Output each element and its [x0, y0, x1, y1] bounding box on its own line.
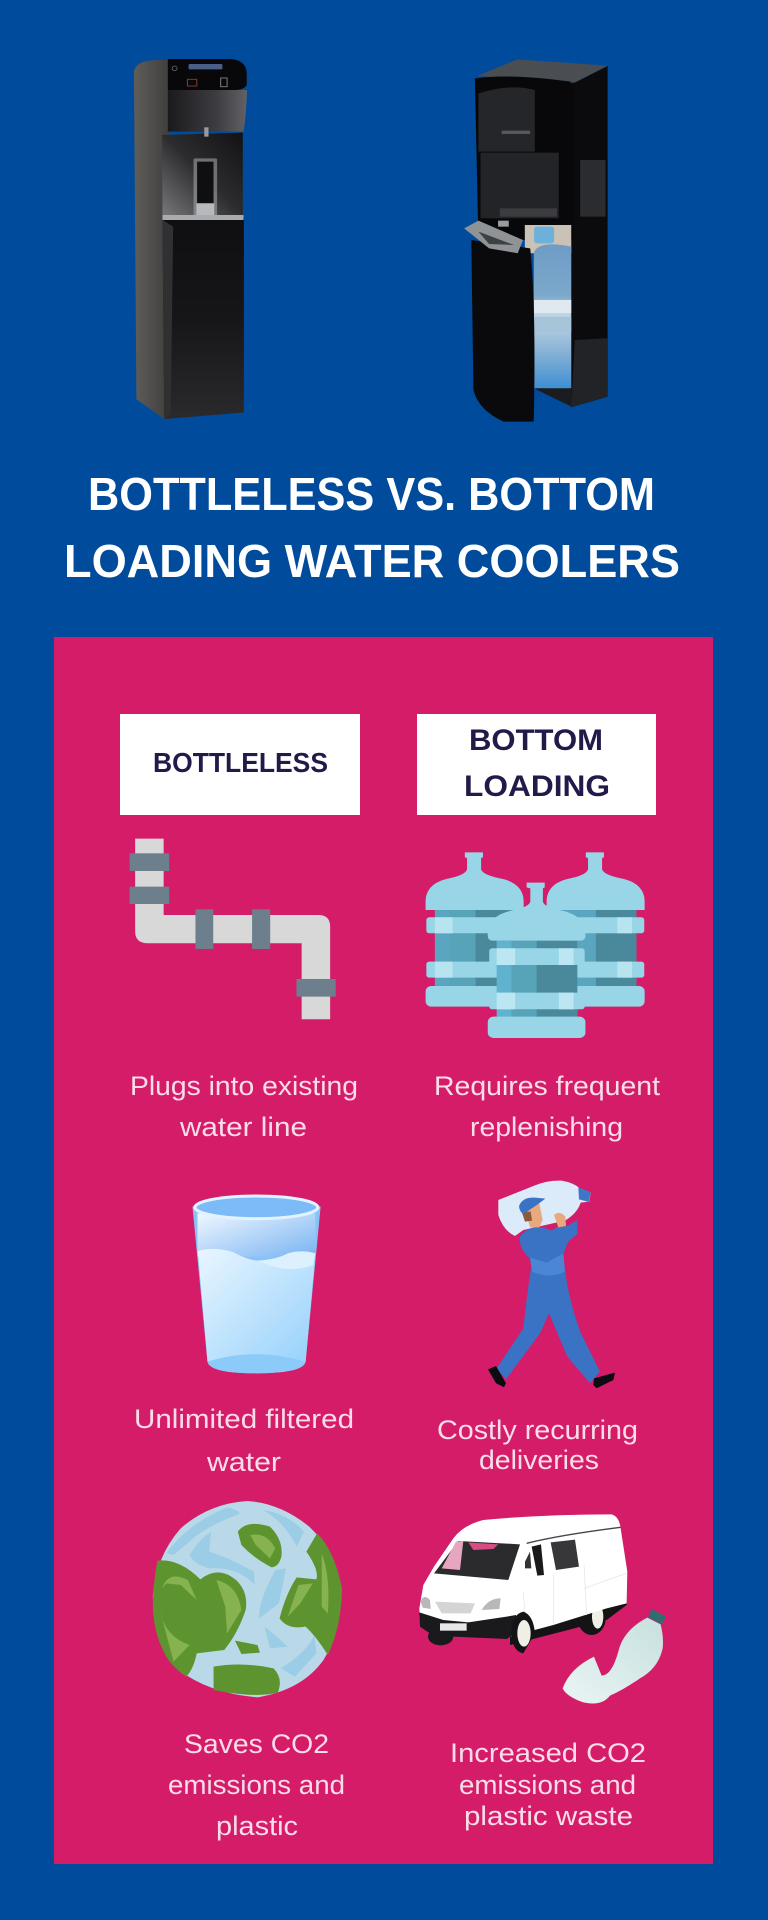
water jug inside cooler: [525, 225, 571, 407]
text: increased co2 emissions and plastic waste: plastic waste: [464, 1801, 633, 1831]
text: increased co2 emissions and plastic waste: Increased CO2: [450, 1738, 646, 1768]
text: requires frequent replenishing: replenishing: [470, 1112, 623, 1142]
text: saves co2 emissions and plastic: emissions and: [168, 1770, 345, 1800]
legs: [497, 1270, 600, 1383]
title: LOADING WATER COOLERS: [64, 535, 680, 587]
column heading: bottleless: [120, 714, 360, 815]
text: increased co2 emissions and plastic waste: emissions and: [459, 1770, 636, 1800]
icon: white van: [419, 1514, 627, 1653]
image: bottleless water cooler: [134, 59, 247, 419]
text: plugs into existing water line: [130, 1071, 358, 1142]
head: [525, 1203, 543, 1227]
torso: [520, 1220, 577, 1275]
grille and headlights: [435, 1602, 475, 1613]
title: [64, 468, 680, 587]
text: costly recurring deliveries: deliveries: [479, 1445, 599, 1475]
icon: pipe: [130, 839, 336, 1019]
text: costly recurring deliveries: [437, 1415, 638, 1475]
text: unlimited filtered water: Unlimited filtered: [134, 1404, 354, 1434]
right jug: [547, 852, 645, 1007]
jug: [498, 1181, 591, 1236]
side windows: [532, 1544, 544, 1576]
windshield: [434, 1541, 520, 1580]
glass: [194, 158, 217, 218]
text: plugs into existing water line: water line: [179, 1112, 307, 1142]
image: bottom loading water cooler: [464, 59, 608, 422]
left jug: [426, 852, 524, 1007]
text: costly recurring deliveries: Costly recurring: [437, 1415, 638, 1445]
text: plugs into existing water line: Plugs into existing: [130, 1071, 358, 1101]
door: [471, 240, 534, 422]
text: requires frequent replenishing: [434, 1071, 661, 1142]
column heading: bottom loading: BOTTOM: [469, 724, 603, 757]
text: saves co2 emissions and plastic: Saves CO2: [184, 1729, 329, 1759]
text: saves co2 emissions and plastic: plastic: [216, 1811, 298, 1841]
land: [153, 1560, 246, 1677]
icon: glass of water: [192, 1196, 321, 1373]
text: saves co2 emissions and plastic: [168, 1729, 345, 1841]
underbody and wheels: [428, 1595, 627, 1645]
column heading: bottom loading: [417, 714, 656, 815]
text: unlimited filtered water: [134, 1404, 354, 1477]
front wheel: [511, 1612, 535, 1653]
text: requires frequent replenishing: Requires frequent: [434, 1071, 661, 1101]
shoes: [488, 1366, 506, 1387]
column heading: bottom loading: LOADING: [464, 770, 610, 803]
column heading: bottleless: BOTTLELESS: [153, 747, 328, 778]
icon: crushed plastic bottle: [563, 1609, 666, 1704]
icon: delivery man carrying jug: [488, 1181, 615, 1388]
icon: water jugs: [426, 852, 645, 1038]
panel: comparison: [54, 637, 713, 1864]
bumper: [419, 1612, 517, 1639]
text: unlimited filtered water: water: [206, 1447, 281, 1477]
icon: earth: [153, 1501, 342, 1697]
title: BOTTLELESS VS. BOTTOM: [88, 468, 655, 520]
text: increased co2 emissions and plastic waste: [450, 1738, 646, 1831]
front jug: [488, 883, 585, 1038]
jug cap: [578, 1187, 591, 1202]
hand: [554, 1213, 566, 1227]
